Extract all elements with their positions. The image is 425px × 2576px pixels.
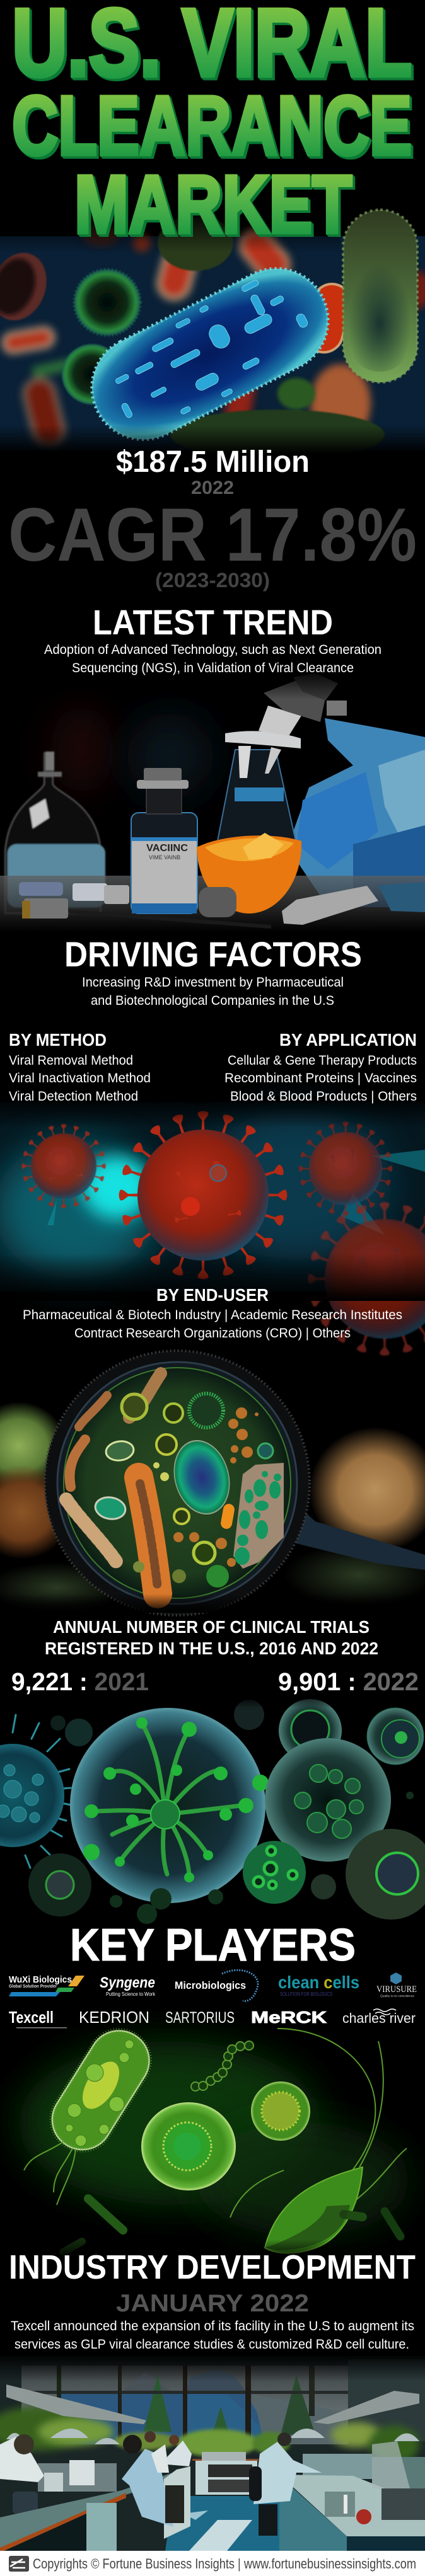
segment: by application: Cellular & Gene Therapy Products (228, 1053, 417, 1068)
logo: Texcell: Texcell (9, 2008, 54, 2027)
development description (11, 2319, 414, 2352)
segment: by end-user: Pharmaceutical & Biotech Industry | Academic Research Institutes (23, 1308, 402, 1322)
flagellate body (265, 2167, 363, 2253)
small dotted cell (251, 2081, 310, 2141)
big cell with green arms (70, 1708, 269, 1903)
blurred microbe: bottom left (0, 1562, 126, 1613)
image: bacteria hero (0, 210, 425, 479)
logo: WuXi Biologics (9, 1974, 84, 1996)
image: magnifying glass over microbes (0, 1351, 425, 1615)
market size value: $187.5 Million (116, 445, 310, 479)
development description: Texcell announced the expansion of its facility in the U.S to augment its (11, 2319, 414, 2333)
segment: by application: Recombinant Proteins | Vaccines (224, 1071, 417, 1085)
logo: Virusure (376, 1972, 417, 1998)
round cell (141, 2102, 236, 2190)
CAGR period: (2023-2030) (155, 569, 270, 592)
logo: Kedrion: KEDRION (79, 2008, 149, 2027)
market size year: 2022 (191, 478, 234, 498)
cell patch (233, 1463, 284, 1569)
logo: Microbiologics (175, 1970, 258, 2001)
green central oval (166, 1434, 238, 1521)
latest trend description: Adoption of Advanced Technology, such as Next Generation (44, 643, 381, 657)
cocci chain (191, 2041, 253, 2091)
image: lab vial and flask (0, 668, 425, 932)
main blue bacterium (74, 251, 346, 457)
logo: Charles River: charles river (342, 2010, 416, 2026)
driving factors description (82, 975, 344, 1008)
logo: Syngene (100, 1974, 156, 1997)
rod bacterium (41, 2020, 160, 2161)
blurred microbe: left green (0, 1402, 66, 1490)
development date: JANUARY 2022 (116, 2290, 309, 2317)
segment: by end-user: BY END-USER (156, 1285, 269, 1305)
vaccine vial: VIME VAINB (149, 854, 180, 861)
title (12, 0, 412, 250)
heading: driving factors: DRIVING FACTORS (64, 934, 362, 974)
logo: Syngene: Putting Science to Work (106, 1991, 156, 1997)
conical flask with white cap (217, 673, 347, 844)
left teal cell (0, 1715, 71, 1868)
right small virus (299, 1122, 392, 1215)
floor (165, 2496, 279, 2551)
image: green and teal cells (0, 1695, 425, 1924)
dark rods (63, 2199, 400, 2252)
development description: services as GLP viral clearance studies & customized R&D cell culture. (15, 2337, 409, 2352)
logo: clean cells: SOLUTION FOR BIOLOGICS (280, 1991, 332, 1997)
lens view (64, 1368, 291, 1598)
lens rim (45, 1351, 310, 1615)
table with instruments (0, 876, 425, 932)
round microbes (93, 1394, 273, 1588)
segment: by method: Viral Detection Method (9, 1089, 138, 1104)
bench items and lamps (6, 2429, 425, 2514)
orange slice (197, 833, 301, 913)
driving factors description: Increasing R&D investment by Pharmaceutical (82, 975, 344, 990)
heading: latest trend: LATEST TREND (93, 602, 333, 642)
heading: annual clinical trials: REGISTERED IN THE U.S., 2016 AND 2022 (45, 1639, 378, 1658)
stat: 2022 clinical trials: 9,901 : 2022 (278, 1668, 419, 1696)
logo: Sartorius: SARTORIUS (165, 2009, 235, 2027)
image: laboratory with scientists (0, 2353, 425, 2553)
blurred microbe: left rust (0, 1465, 73, 1559)
segment: by application: Blood & Blood Products | Others (230, 1089, 417, 1104)
orange granules (173, 1407, 259, 1567)
blue cloth (288, 718, 425, 907)
title: MARKET (74, 158, 352, 250)
latest trend description (44, 643, 381, 675)
image: green microbes (0, 2020, 425, 2356)
logo: WuXi Biologics: WuXi Biologics (9, 1974, 72, 1985)
vaccine vial (131, 768, 197, 913)
logo: WuXi Biologics: Global Solution Provider (9, 1984, 57, 1989)
logo: Virusure: VIRUSURE (376, 1984, 417, 1995)
top right ring cells (279, 1699, 424, 1765)
green bacterium (343, 210, 417, 382)
stat: 2021 clinical trials: 9,221 : 2021 (11, 1668, 149, 1696)
segment: by application (224, 1030, 417, 1104)
handle (291, 1509, 425, 1570)
bottom right large virus (308, 1202, 425, 1356)
driving factors description: and Biotechnological Companies in the U.S (91, 993, 334, 1008)
segment: by end-user (23, 1285, 402, 1341)
heading: annual clinical trials (45, 1617, 378, 1658)
right bench (279, 2475, 425, 2551)
segment: by method: BY METHOD (9, 1030, 107, 1050)
logo: Microbiologics: Microbiologics (175, 1979, 246, 1991)
logo: Fortune Business Insights (9, 2556, 29, 2572)
tube microbes (66, 1373, 161, 1594)
window with mountains (21, 2366, 348, 2444)
blurred microbe: right tan (309, 1427, 425, 1553)
plants outside the window (0, 2407, 419, 2463)
segment: by end-user: Contract Research Organizations (CRO) | Others (74, 1326, 351, 1341)
logo: Virusure: Quality is no coincidence (380, 1995, 414, 1998)
right cell with dark green cluster (265, 1738, 391, 1862)
flagella (24, 2029, 407, 2218)
latest trend description: Sequencing (NGS), in Validation of Viral Clearance (72, 661, 354, 675)
bottom right cells (243, 1829, 425, 1920)
ceiling light panels (6, 2384, 419, 2424)
left small virus (21, 1124, 106, 1208)
image: coronavirus particles (0, 1096, 425, 1356)
footer (0, 2551, 425, 2576)
segment: by method (9, 1030, 151, 1104)
round flask (5, 752, 105, 913)
main red virus (119, 1111, 287, 1279)
logo: Syngene: Syngene (100, 1974, 155, 1991)
left bench (0, 2466, 190, 2553)
heading: annual clinical trials: ANNUAL NUMBER OF CLINICAL TRIALS (53, 1617, 370, 1637)
segment: by method: Viral Inactivation Method (9, 1071, 151, 1085)
centre shelving (192, 2459, 259, 2495)
segment: by method: Viral Removal Method (9, 1053, 133, 1068)
scientists (0, 2431, 410, 2536)
segment: by application: BY APPLICATION (279, 1030, 417, 1050)
vaccine vial: VACIINC (146, 843, 188, 854)
logo: clean cells: clean cells (278, 1972, 359, 1992)
heading: key players: KEY PLAYERS (70, 1920, 356, 1971)
blurred microbe: right dark green (284, 1543, 425, 1606)
logo: Merck: MeRCK (251, 2008, 327, 2027)
